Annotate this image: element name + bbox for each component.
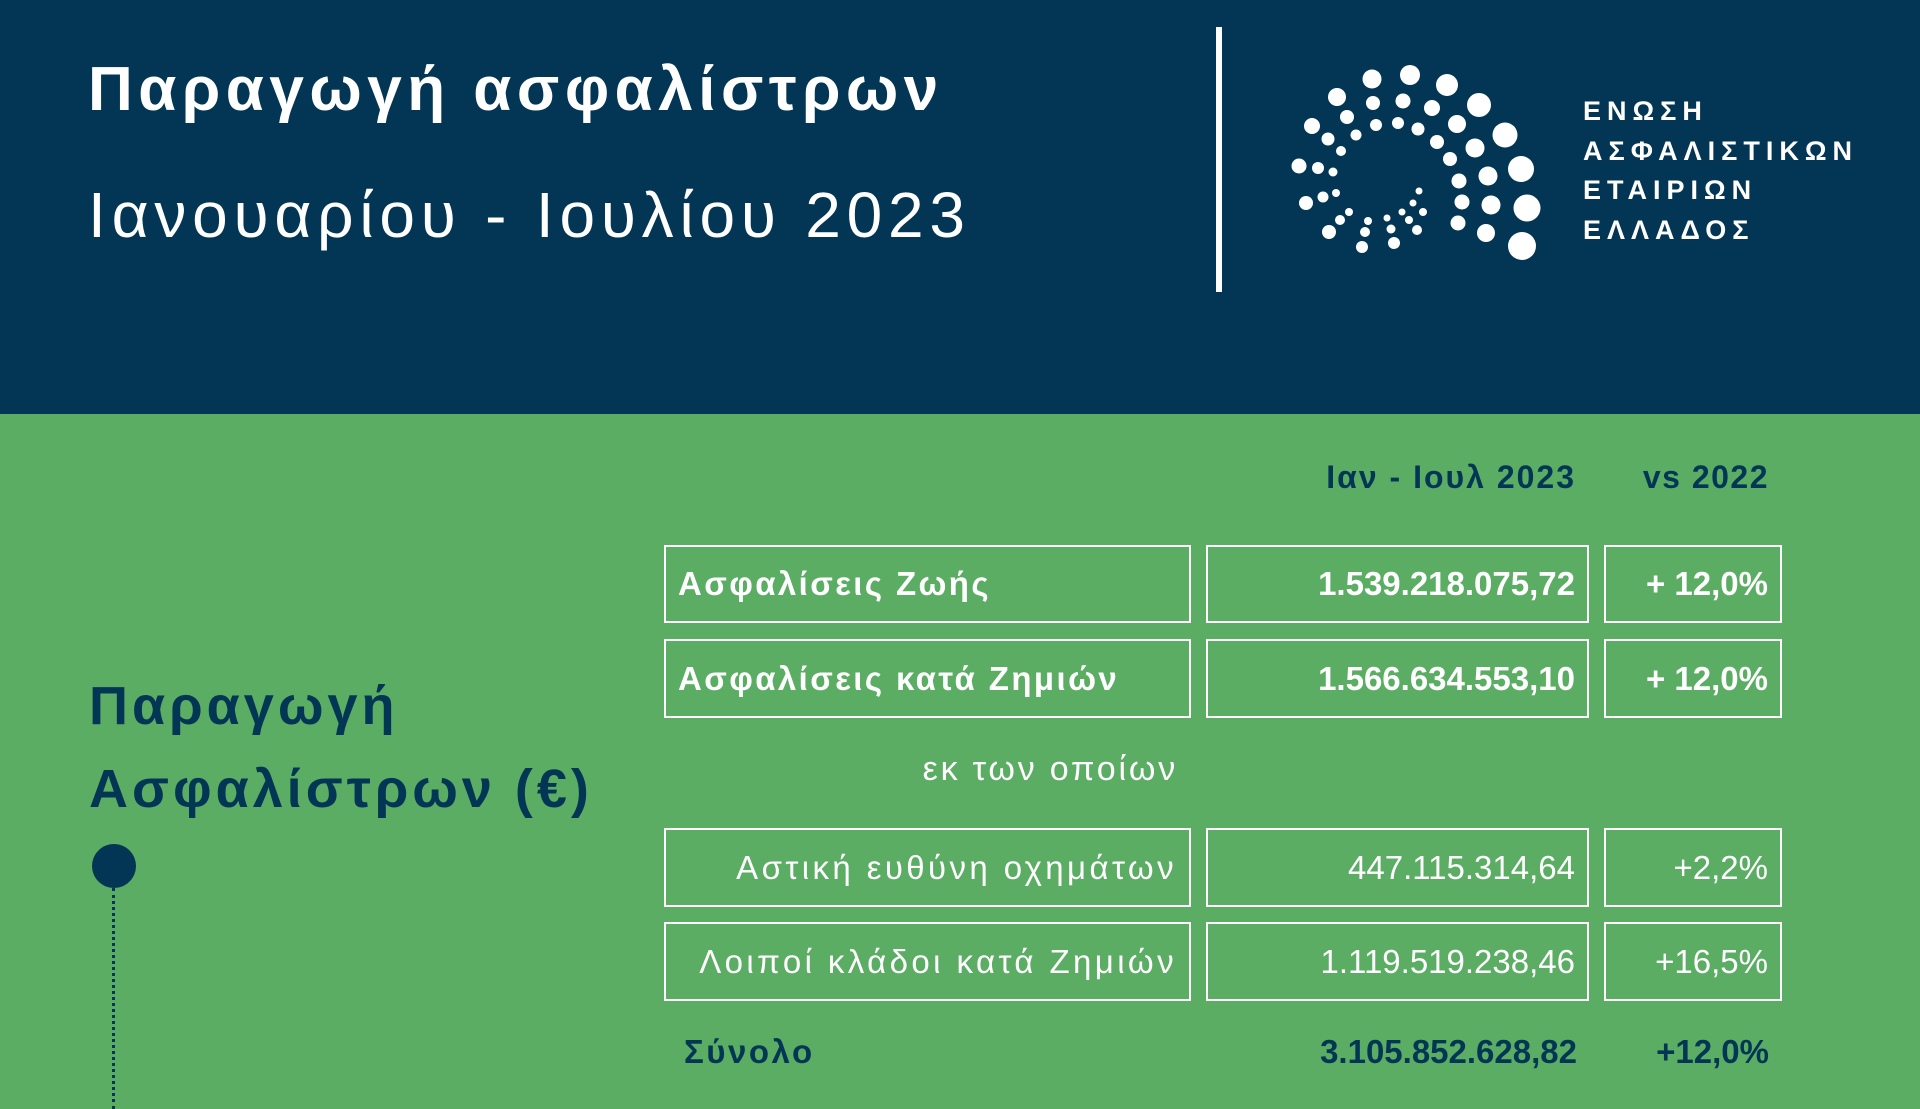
- row: other non-life: [664, 922, 1782, 1001]
- row: non-life: 1.566.634.553,10: [1318, 660, 1575, 696]
- header band: [0, 0, 1920, 414]
- logo text: ΑΣΦΑΛΙΣΤΙΚΩΝ: [1583, 136, 1858, 166]
- title: Παραγωγή ασφαλίστρων: [88, 55, 944, 124]
- logo text: ΕΝΩΣΗ: [1583, 96, 1708, 126]
- row: other non-life: +16,5%: [1655, 942, 1768, 980]
- icon: logo dots: [1292, 65, 1540, 260]
- row: motor liability: Αστική ευθύνη οχημάτων: [736, 848, 1177, 886]
- logo text: ΕΤΑΙΡΙΩΝ: [1583, 175, 1757, 205]
- total row: 3.105.852.628,82: [1320, 1033, 1577, 1070]
- row: non-life: + 12,0%: [1646, 660, 1768, 696]
- timeline dot: [92, 844, 136, 888]
- logo text: ΕΛΛΑΔΟΣ: [1583, 214, 1754, 244]
- row: other non-life: Λοιποί κλάδοι κατά Ζημιών: [699, 942, 1177, 980]
- column header: period: Ιαν - Ιουλ 2023: [1326, 459, 1576, 495]
- timeline dotted line: [112, 888, 115, 1109]
- left heading: Παραγωγή: [89, 676, 398, 736]
- logo text: [1583, 96, 1858, 244]
- total row: Σύνολο: [684, 1033, 815, 1070]
- row: life: + 12,0%: [1646, 565, 1768, 602]
- row: life: [664, 545, 1782, 623]
- of which label: εκ των οποίων: [923, 750, 1178, 788]
- row: motor liability: 447.115.314,64: [1348, 848, 1575, 886]
- subtitle: Ιανουαρίου - Ιουλίου 2023: [88, 179, 971, 251]
- total row: [684, 1033, 1769, 1070]
- vertical divider: [1216, 27, 1222, 292]
- row: life: 1.539.218.075,72: [1318, 565, 1575, 602]
- row: motor liability: [664, 828, 1782, 907]
- row: non-life: [664, 639, 1782, 718]
- row: other non-life: 1.119.519.238,46: [1321, 942, 1575, 980]
- total row: +12,0%: [1656, 1033, 1769, 1070]
- left heading: Ασφαλίστρων (€): [89, 759, 593, 819]
- row: life: Ασφαλίσεις Ζωής: [678, 565, 991, 602]
- column header: vs 2022: vs 2022: [1643, 459, 1769, 495]
- left heading: [89, 676, 593, 819]
- row: motor liability: +2,2%: [1674, 848, 1768, 886]
- row: non-life: Ασφαλίσεις κατά Ζημιών: [678, 660, 1119, 696]
